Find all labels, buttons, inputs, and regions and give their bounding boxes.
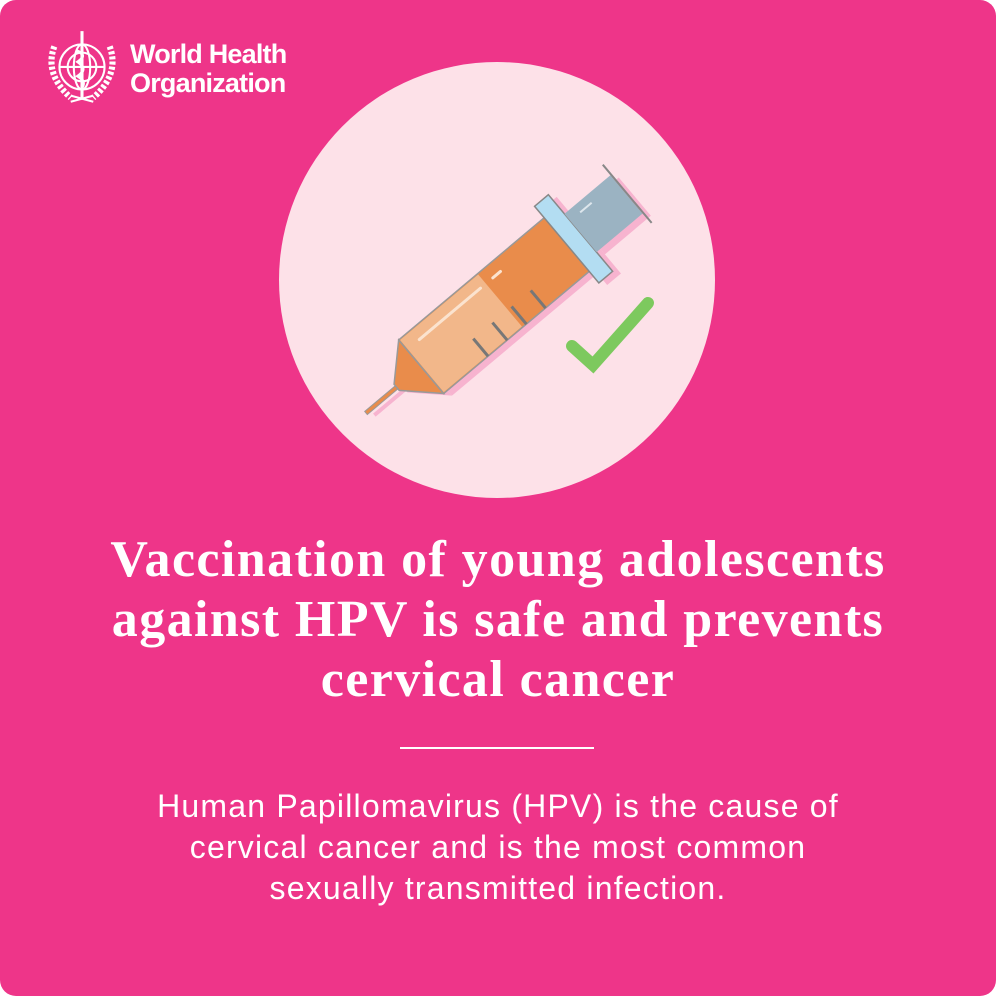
icon: check mark	[572, 303, 648, 365]
title: cervical cancer	[321, 651, 675, 708]
icon: WHO emblem	[48, 31, 116, 103]
divider	[400, 747, 594, 749]
logo text	[130, 39, 286, 98]
body text: sexually transmitted infection.	[270, 870, 726, 906]
logo text: Organization	[130, 68, 285, 98]
logo text: World Health	[130, 39, 286, 69]
icon: syringe	[334, 153, 667, 457]
title: Vaccination of young adolescents	[110, 531, 886, 588]
circle background	[279, 62, 715, 498]
illustration: syringe in circle	[279, 62, 715, 498]
body text: Human Papillomavirus (HPV) is the cause of	[157, 788, 839, 824]
body text: cervical cancer and is the most common	[190, 829, 806, 865]
title: against HPV is safe and prevents	[112, 591, 884, 648]
body text	[157, 788, 839, 906]
title	[110, 531, 886, 708]
logo: WHO	[48, 31, 286, 103]
